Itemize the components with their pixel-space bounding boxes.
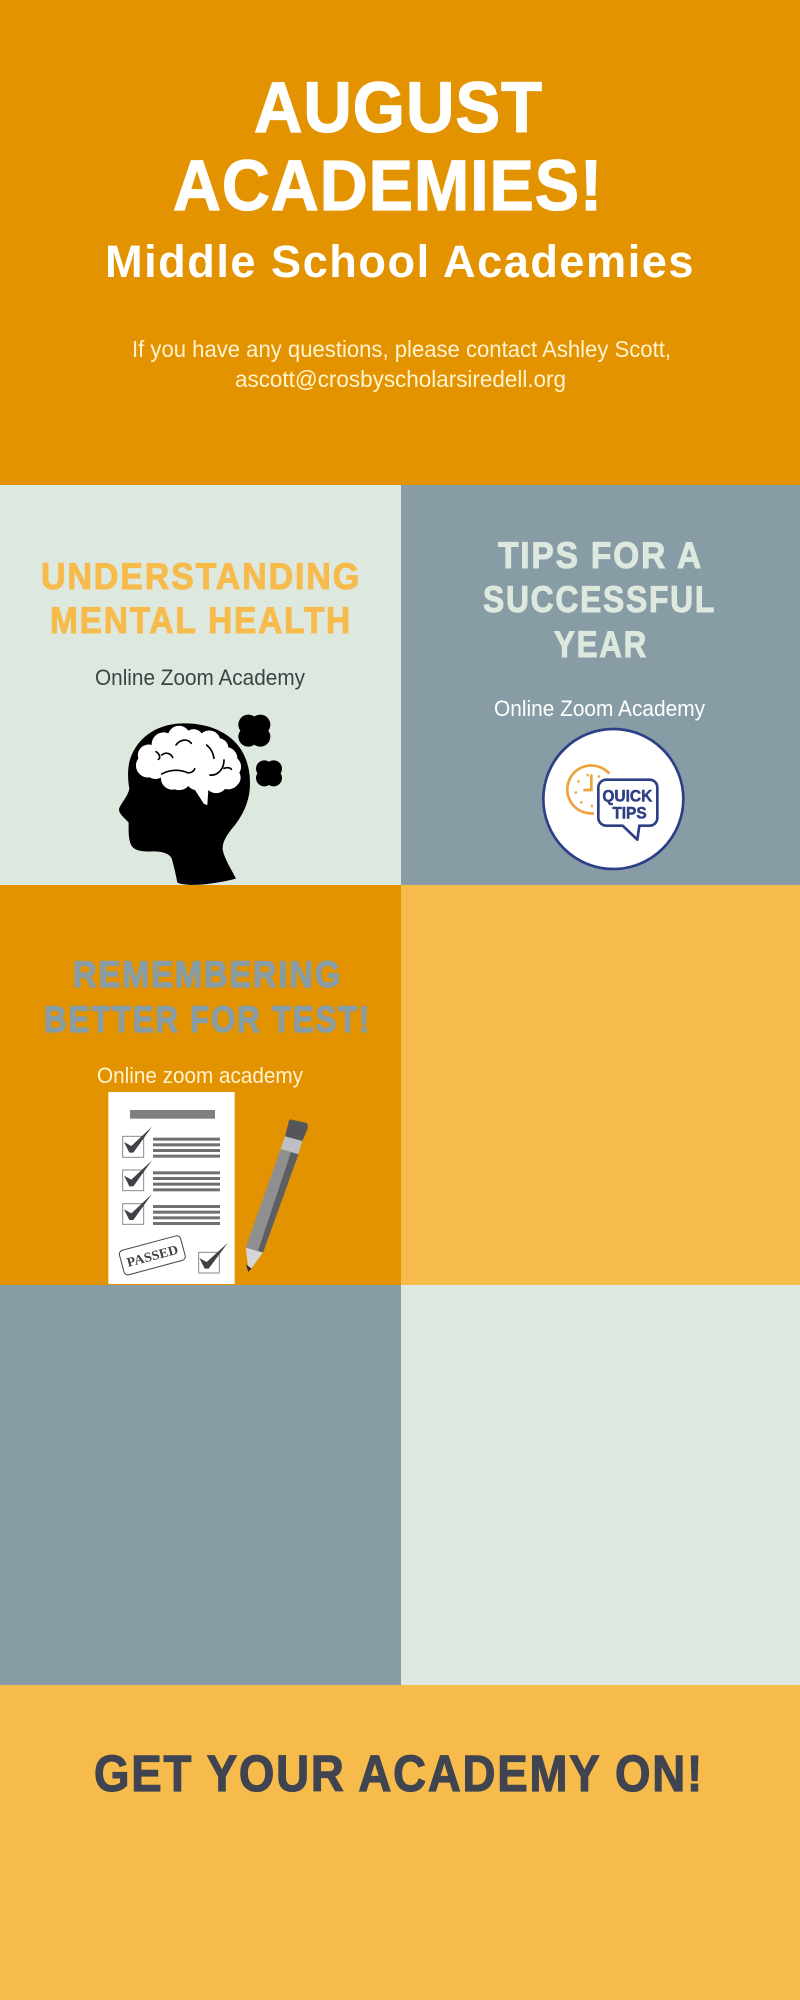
pencil xyxy=(285,1119,308,1141)
heading: REMEMBERING xyxy=(73,954,342,995)
heading xyxy=(41,556,361,641)
subtitle: Middle School Academies xyxy=(105,236,695,287)
heading: MENTAL HEALTH xyxy=(50,600,352,641)
panel: empty light xyxy=(401,1285,800,1685)
contact text xyxy=(132,336,671,392)
speech bubble xyxy=(598,780,657,840)
subheading: Online Zoom Academy xyxy=(95,665,306,690)
subheading: Online zoom academy xyxy=(97,1063,304,1088)
panel: empty slate xyxy=(0,1285,401,1685)
icon: quick tips badge: TIPS xyxy=(612,803,647,822)
icon: head with brain xyxy=(119,715,282,885)
icon: passed test and pencil xyxy=(108,1092,308,1284)
title xyxy=(173,69,603,226)
subheading: Online Zoom Academy xyxy=(494,696,706,721)
heading xyxy=(44,954,371,1040)
passed stamp: PASSED xyxy=(125,1242,180,1270)
heading: BETTER FOR TEST! xyxy=(44,999,371,1040)
contact text: If you have any questions, please contact Ashley Scott, xyxy=(132,336,671,362)
header panel xyxy=(0,0,800,485)
passed stamp xyxy=(118,1235,186,1276)
heading: YEAR xyxy=(554,624,648,665)
icon: quick tips badge: QUICK xyxy=(602,787,652,806)
panel: understanding mental health xyxy=(0,485,401,885)
panel: empty yellow xyxy=(401,885,800,1285)
panel: tips for a successful year xyxy=(401,485,800,885)
thought clouds xyxy=(238,715,282,786)
footer heading: GET YOUR ACADEMY ON! xyxy=(94,1745,704,1802)
icon: quick tips badge xyxy=(543,729,683,869)
heading xyxy=(483,535,716,665)
title: AUGUST xyxy=(254,69,543,148)
heading: TIPS FOR A xyxy=(498,535,703,576)
heading: SUCCESSFUL xyxy=(483,579,716,620)
clock xyxy=(567,765,609,813)
contact text: ascott@crosbyscholarsiredell.org xyxy=(235,366,566,392)
title: ACADEMIES! xyxy=(173,147,603,226)
panel: remembering better for test xyxy=(0,885,401,1285)
footer panel xyxy=(0,1685,800,2000)
heading: UNDERSTANDING xyxy=(41,556,361,597)
